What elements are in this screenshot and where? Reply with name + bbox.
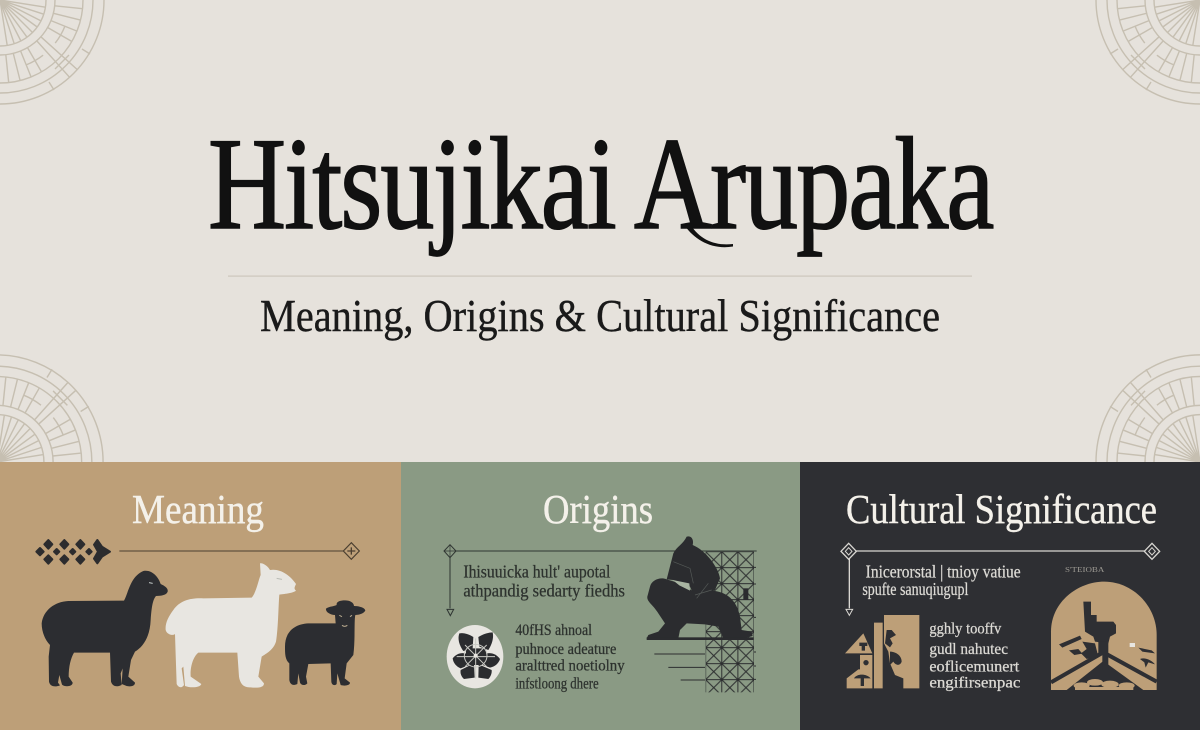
silhouette highlights (673, 562, 712, 598)
decorative corner motif: top right (1096, 0, 1200, 104)
inner gable (1067, 661, 1143, 690)
body text: emblem caption (515, 622, 625, 692)
icon: arched temple scene (1051, 582, 1157, 690)
body text: building caption: engifirsenpac (929, 674, 1021, 691)
panel: cultural significance (800, 462, 1200, 730)
icon: building blocks (845, 615, 919, 688)
body text: building caption: eoflicemunert (929, 659, 1020, 676)
body text: building caption: gudl nahutec (929, 641, 1008, 658)
diamond ornament (36, 540, 110, 564)
heading: meaning: Meaning (132, 486, 264, 532)
shepherd and sheep silhouette (647, 536, 753, 640)
origins diagram artwork (444, 545, 757, 692)
small label: S'TEIOBA (1065, 565, 1105, 574)
body text: building caption: gghly tooffv (929, 620, 1002, 637)
decorative corner motif: top left (0, 0, 104, 104)
tower shaft (1098, 642, 1108, 670)
sheep facial details (149, 578, 352, 626)
bracket line with diamond ends (841, 543, 1160, 615)
body text: emblem caption: 40fHS ahnoal (515, 622, 592, 639)
shepherd figure (667, 536, 720, 598)
lattice figure (743, 588, 748, 600)
bracket line with diamond and arrow (444, 545, 757, 616)
cultural diagram artwork (841, 543, 1160, 691)
body text: emblem caption: aralttred noetiolny (515, 658, 625, 675)
divider under title (228, 276, 972, 277)
lattice lead lines (654, 567, 756, 680)
lattice (706, 552, 754, 692)
title: Hitsujikai Arupaka (208, 111, 993, 258)
body text: origins: Ihisuuicka hult' aupotal (463, 561, 610, 581)
ground shadow (647, 637, 753, 640)
body text: significance: Inicerorstal | tnioy vatiue (866, 561, 1021, 581)
sheep body (647, 578, 753, 639)
light spot (1130, 643, 1135, 647)
roof chevron (1051, 652, 1157, 682)
decorative corner motif: bottom right (1096, 355, 1200, 462)
decorative corner motif: bottom left (0, 355, 103, 462)
icon: white alpaca (166, 563, 296, 688)
tower (1083, 602, 1116, 643)
subtitle: Meaning, Origins & Cultural Significance (260, 290, 940, 341)
foliage left and right (1059, 636, 1155, 668)
panel: meaning (0, 462, 401, 730)
heading: cultural significance: Cultural Significance (846, 486, 1157, 532)
body text: building caption (929, 620, 1021, 691)
sheep illustrations (36, 540, 365, 688)
body text: origins second line: athpandig sedarty fiedhs (463, 581, 625, 601)
icon: black sheep (42, 571, 168, 686)
divider with end ornament (119, 543, 359, 559)
body text: emblem caption: infstloong dhere (515, 675, 599, 692)
light gap between figures (673, 580, 690, 591)
heading: origins: Origins (543, 486, 653, 532)
body text: emblem caption: puhnoce adeature (515, 641, 617, 658)
panel: origins (401, 462, 800, 730)
icon: small black sheep (285, 600, 365, 686)
body text: significance second line: spufte sanuqiugupl (862, 579, 968, 599)
icon: flower emblem (447, 625, 503, 688)
gable clouds (1074, 679, 1135, 690)
